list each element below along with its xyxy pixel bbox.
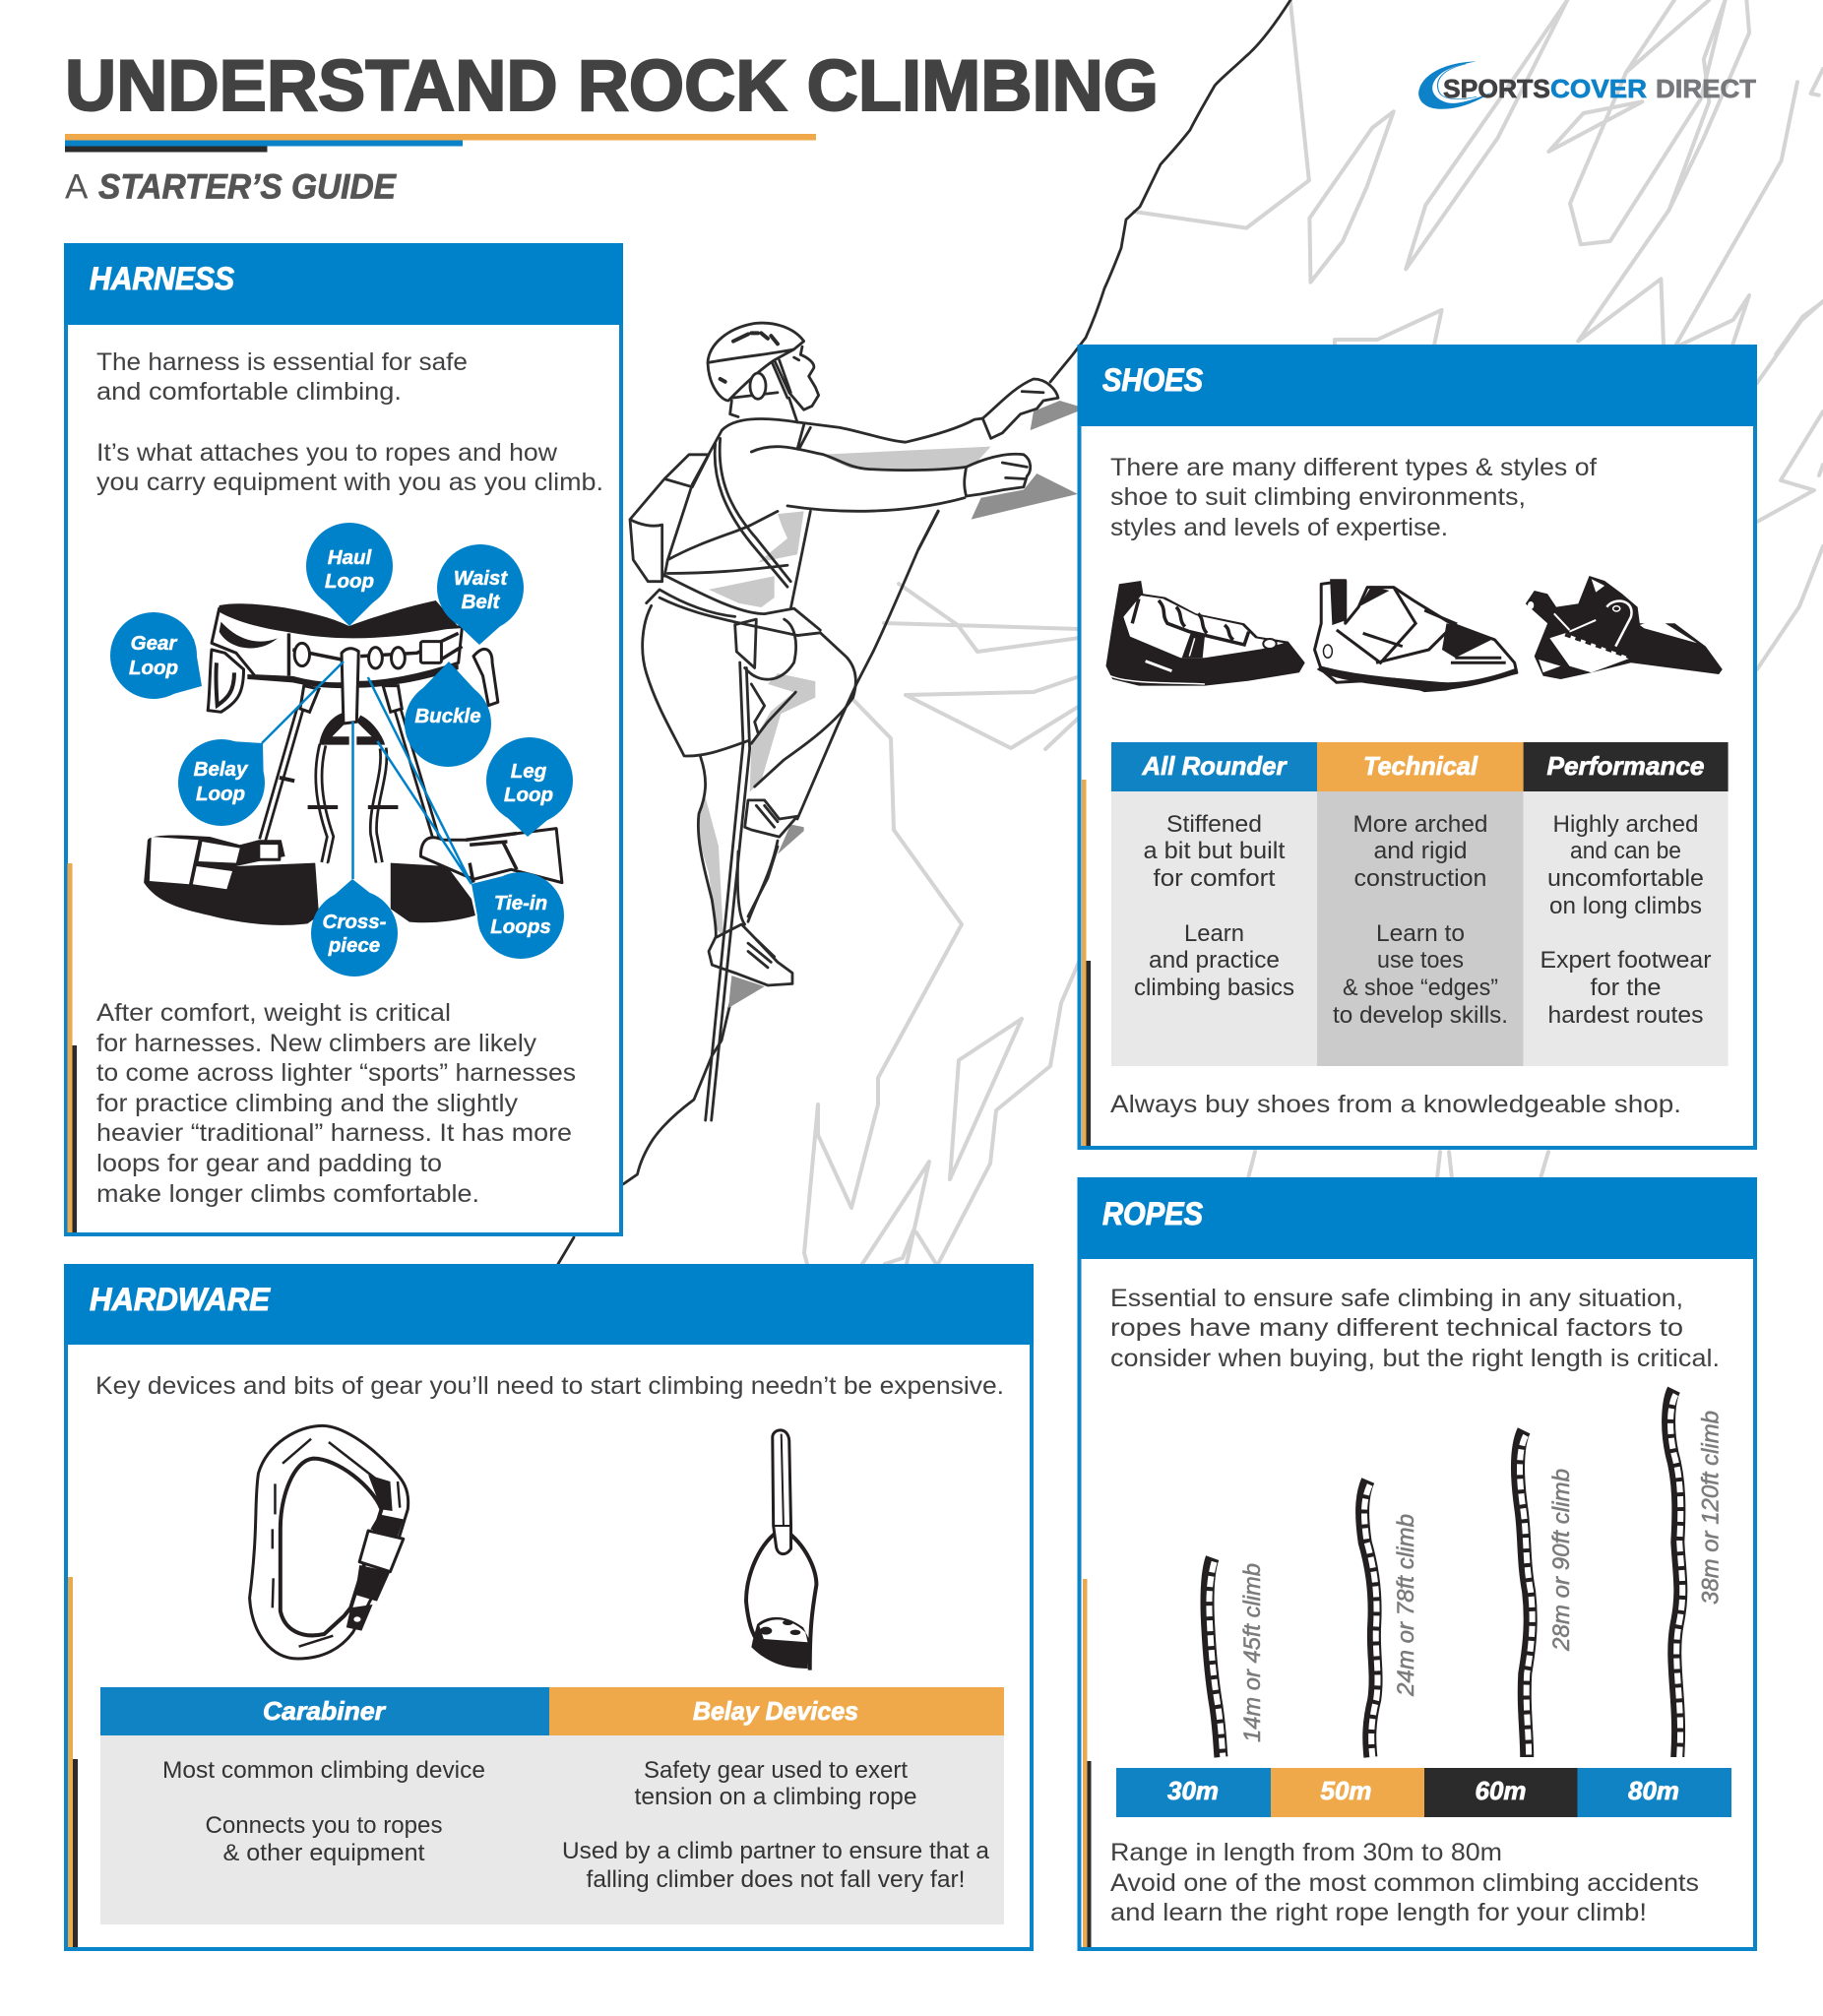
callout: tie-in loops: Tie-in [494,892,547,914]
column: performance: Performance [1547,751,1705,781]
intro text: It’s what attaches you to ropes and how [96,439,558,467]
callout: cross-piece: Cross- [323,911,387,933]
icon: carabiner [250,1425,409,1659]
column: belay devices: falling climber does not fall very far! [587,1866,965,1893]
column: technical: use toes [1377,947,1464,974]
rope: 30m [1208,1558,1223,1757]
body text: heavier “traditional” harness. It has more [96,1119,572,1147]
column: performance: for the [1591,975,1662,1001]
intro text: There are many different types & styles of [1110,454,1597,481]
callout: belay loop: Belay [194,758,249,781]
body text: for practice climbing and the slightly [96,1090,519,1117]
column: technical: Technical [1363,751,1478,781]
panel: ropes [1077,1177,1757,1949]
callout lines [262,662,471,884]
title: UNDERSTAND ROCK CLIMBING [65,46,1159,126]
length bar: 50m [1321,1776,1372,1805]
shoulder rope loop [715,438,790,587]
rope labels: 28m or 90ft climb [1548,1469,1575,1652]
callout: leg loop: Loop [504,784,553,806]
column: carabiner: Most common climbing device [162,1757,485,1784]
intro text [1110,454,1597,541]
column: all rounder [1111,742,1317,1066]
footer text: Range in length from 30m to 80m [1110,1839,1502,1866]
cliff edge line [558,0,1290,1264]
logo: COVER [1550,74,1647,103]
column: belay devices: tension on a climbing rope [634,1784,917,1810]
column: carabiner: & other equipment [222,1840,425,1866]
column: technical: & shoe “edges” [1343,975,1498,1001]
column: all rounder: All Rounder [1142,751,1288,781]
background rock texture lines [804,0,1823,1264]
column: technical: Learn to [1376,920,1465,947]
rope labels: 14m or 45ft climb [1239,1563,1266,1742]
heading: HARDWARE [90,1282,272,1317]
length bar: 60m [1475,1776,1526,1805]
intro text: and comfortable climbing. [96,378,402,406]
column: carabiner: Carabiner [263,1696,387,1726]
callout: tie-in loops [471,872,564,959]
rope labels [1239,1411,1725,1742]
backpack [630,455,709,582]
illustrations: rope lengths [1208,1390,1682,1757]
column: belay devices: Used by a climb partner to ensure that a [562,1838,989,1864]
rope: 80m [1668,1390,1682,1757]
body text: loops for gear and padding to [96,1150,442,1177]
column: performance: on long climbs [1549,893,1702,919]
panel: shoes [1077,345,1757,1148]
intro text: shoe to suit climbing environments, [1110,483,1526,511]
body text: to come across lighter “sports” harnesses [96,1059,576,1087]
column: belay devices: Belay Devices [693,1696,858,1726]
column: carabiner [100,1687,549,1924]
intro text: you carry equipment with you as you climb. [96,469,603,496]
intro text: ropes have many different technical factors to [1110,1314,1683,1342]
column: all rounder: climbing basics [1134,975,1294,1001]
heading: HARNESS [90,261,235,296]
footer text: Avoid one of the most common climbing accidents [1110,1869,1699,1897]
illustrations: hardware [250,1425,816,1670]
intro text: consider when buying, but the right length is critical. [1110,1345,1720,1372]
column: performance: and can be [1570,838,1681,864]
callout: leg loop: Leg [511,760,547,783]
callout: cross-piece: piece [328,934,380,957]
logo: SPORTS [1443,74,1550,103]
heading: SHOES [1102,362,1204,398]
callout: tie-in loops: Loops [490,915,551,938]
column: technical: More arched [1352,811,1488,838]
intro text: The harness is essential for safe [96,348,468,376]
hips and legs [643,605,855,940]
subtitle: A [65,167,86,207]
column: all rounder: and practice [1149,947,1280,974]
footer text: Always buy shoes from a knowledgeable shop. [1110,1091,1681,1118]
callout: buckle: Buckle [414,705,481,727]
harness [647,576,820,667]
column: all rounder: for comfort [1154,865,1276,892]
rope: 60m [1518,1430,1533,1757]
table: shoe types [1111,742,1729,1066]
body text: make longer climbs comfortable. [96,1180,479,1208]
callout: gear loop [110,612,202,699]
climbing rope [706,662,750,1120]
callout: haul loop [306,523,393,626]
illustration: climber [630,323,1078,1120]
rope: 50m [1362,1480,1377,1757]
column: all rounder: Stiffened [1166,811,1262,838]
intro text: Essential to ensure safe climbing in any situation, [1110,1285,1683,1312]
table: hardware [100,1687,1004,1924]
icon: swoosh [1418,61,1492,109]
logo: DIRECT [1656,74,1756,103]
helmet and head [708,323,819,422]
callout: haul loop: Loop [325,570,374,593]
lower shoe [709,924,792,985]
shadows and rock holds [697,401,1078,1008]
body text: for harnesses. New climbers are likely [96,1030,537,1057]
panel: harness [64,243,623,1234]
body text: After comfort, weight is critical [96,999,451,1027]
icon: all rounder shoe [1105,581,1305,686]
intro text [96,348,603,496]
icon: belay device [746,1430,816,1670]
callout: waist belt: Waist [454,567,508,590]
illustration: harness [144,600,562,925]
torso and arms [664,418,982,608]
column: performance: Highly arched [1553,811,1699,838]
column: carabiner: Connects you to ropes [205,1812,443,1839]
body text [96,999,576,1208]
footer text: and learn the right rope length for your climb! [1110,1899,1647,1926]
callout: waist belt [437,544,524,645]
column: performance: uncomfortable [1547,865,1704,892]
column: performance: Expert footwear [1540,947,1711,974]
column: belay devices: Safety gear used to exert [644,1757,908,1784]
footer text [1110,1839,1699,1926]
length bar: 80m [1628,1776,1679,1805]
icon: technical shoe [1315,579,1518,691]
upper hand [982,379,1058,438]
column: technical: construction [1354,865,1486,892]
column: technical [1317,742,1524,1066]
title underline bars [65,134,816,152]
length bar [1116,1768,1731,1817]
callout: waist belt: Belt [462,591,501,613]
column: all rounder: a bit but built [1144,838,1286,864]
callout: belay loop: Loop [196,783,245,805]
callout: gear loop: Gear [131,632,177,655]
intro text: styles and levels of expertise. [1110,514,1448,541]
callout: cross-piece [311,879,398,976]
rope labels: 38m or 120ft climb [1697,1411,1725,1605]
panel: hardware [64,1264,1034,1949]
intro text [1110,1285,1720,1372]
column: performance: hardest routes [1547,1002,1703,1029]
callout: belay loop [178,739,265,826]
intro text: Key devices and bits of gear you’ll need to start climbing needn’t be expensive. [95,1372,1004,1400]
subtitle: STARTER’S GUIDE [98,167,398,207]
rope labels: 24m or 78ft climb [1393,1514,1419,1697]
lower hand [965,454,1031,496]
illustrations: three shoes [1105,576,1723,691]
heading: ROPES [1102,1196,1204,1231]
icon: performance shoe [1526,576,1723,679]
callout: gear loop: Loop [129,657,178,679]
column: technical: and rigid [1374,838,1467,864]
callout: leg loop [486,737,573,837]
column: performance [1524,742,1729,1066]
length bar: 30m [1167,1776,1219,1805]
column: belay devices [549,1687,1004,1924]
callout: buckle [405,662,491,767]
column: technical: to develop skills. [1333,1002,1508,1029]
upper shoe [745,800,797,837]
callout: haul loop: Haul [328,546,373,569]
column: all rounder: Learn [1184,920,1244,947]
logo [1418,61,1756,109]
